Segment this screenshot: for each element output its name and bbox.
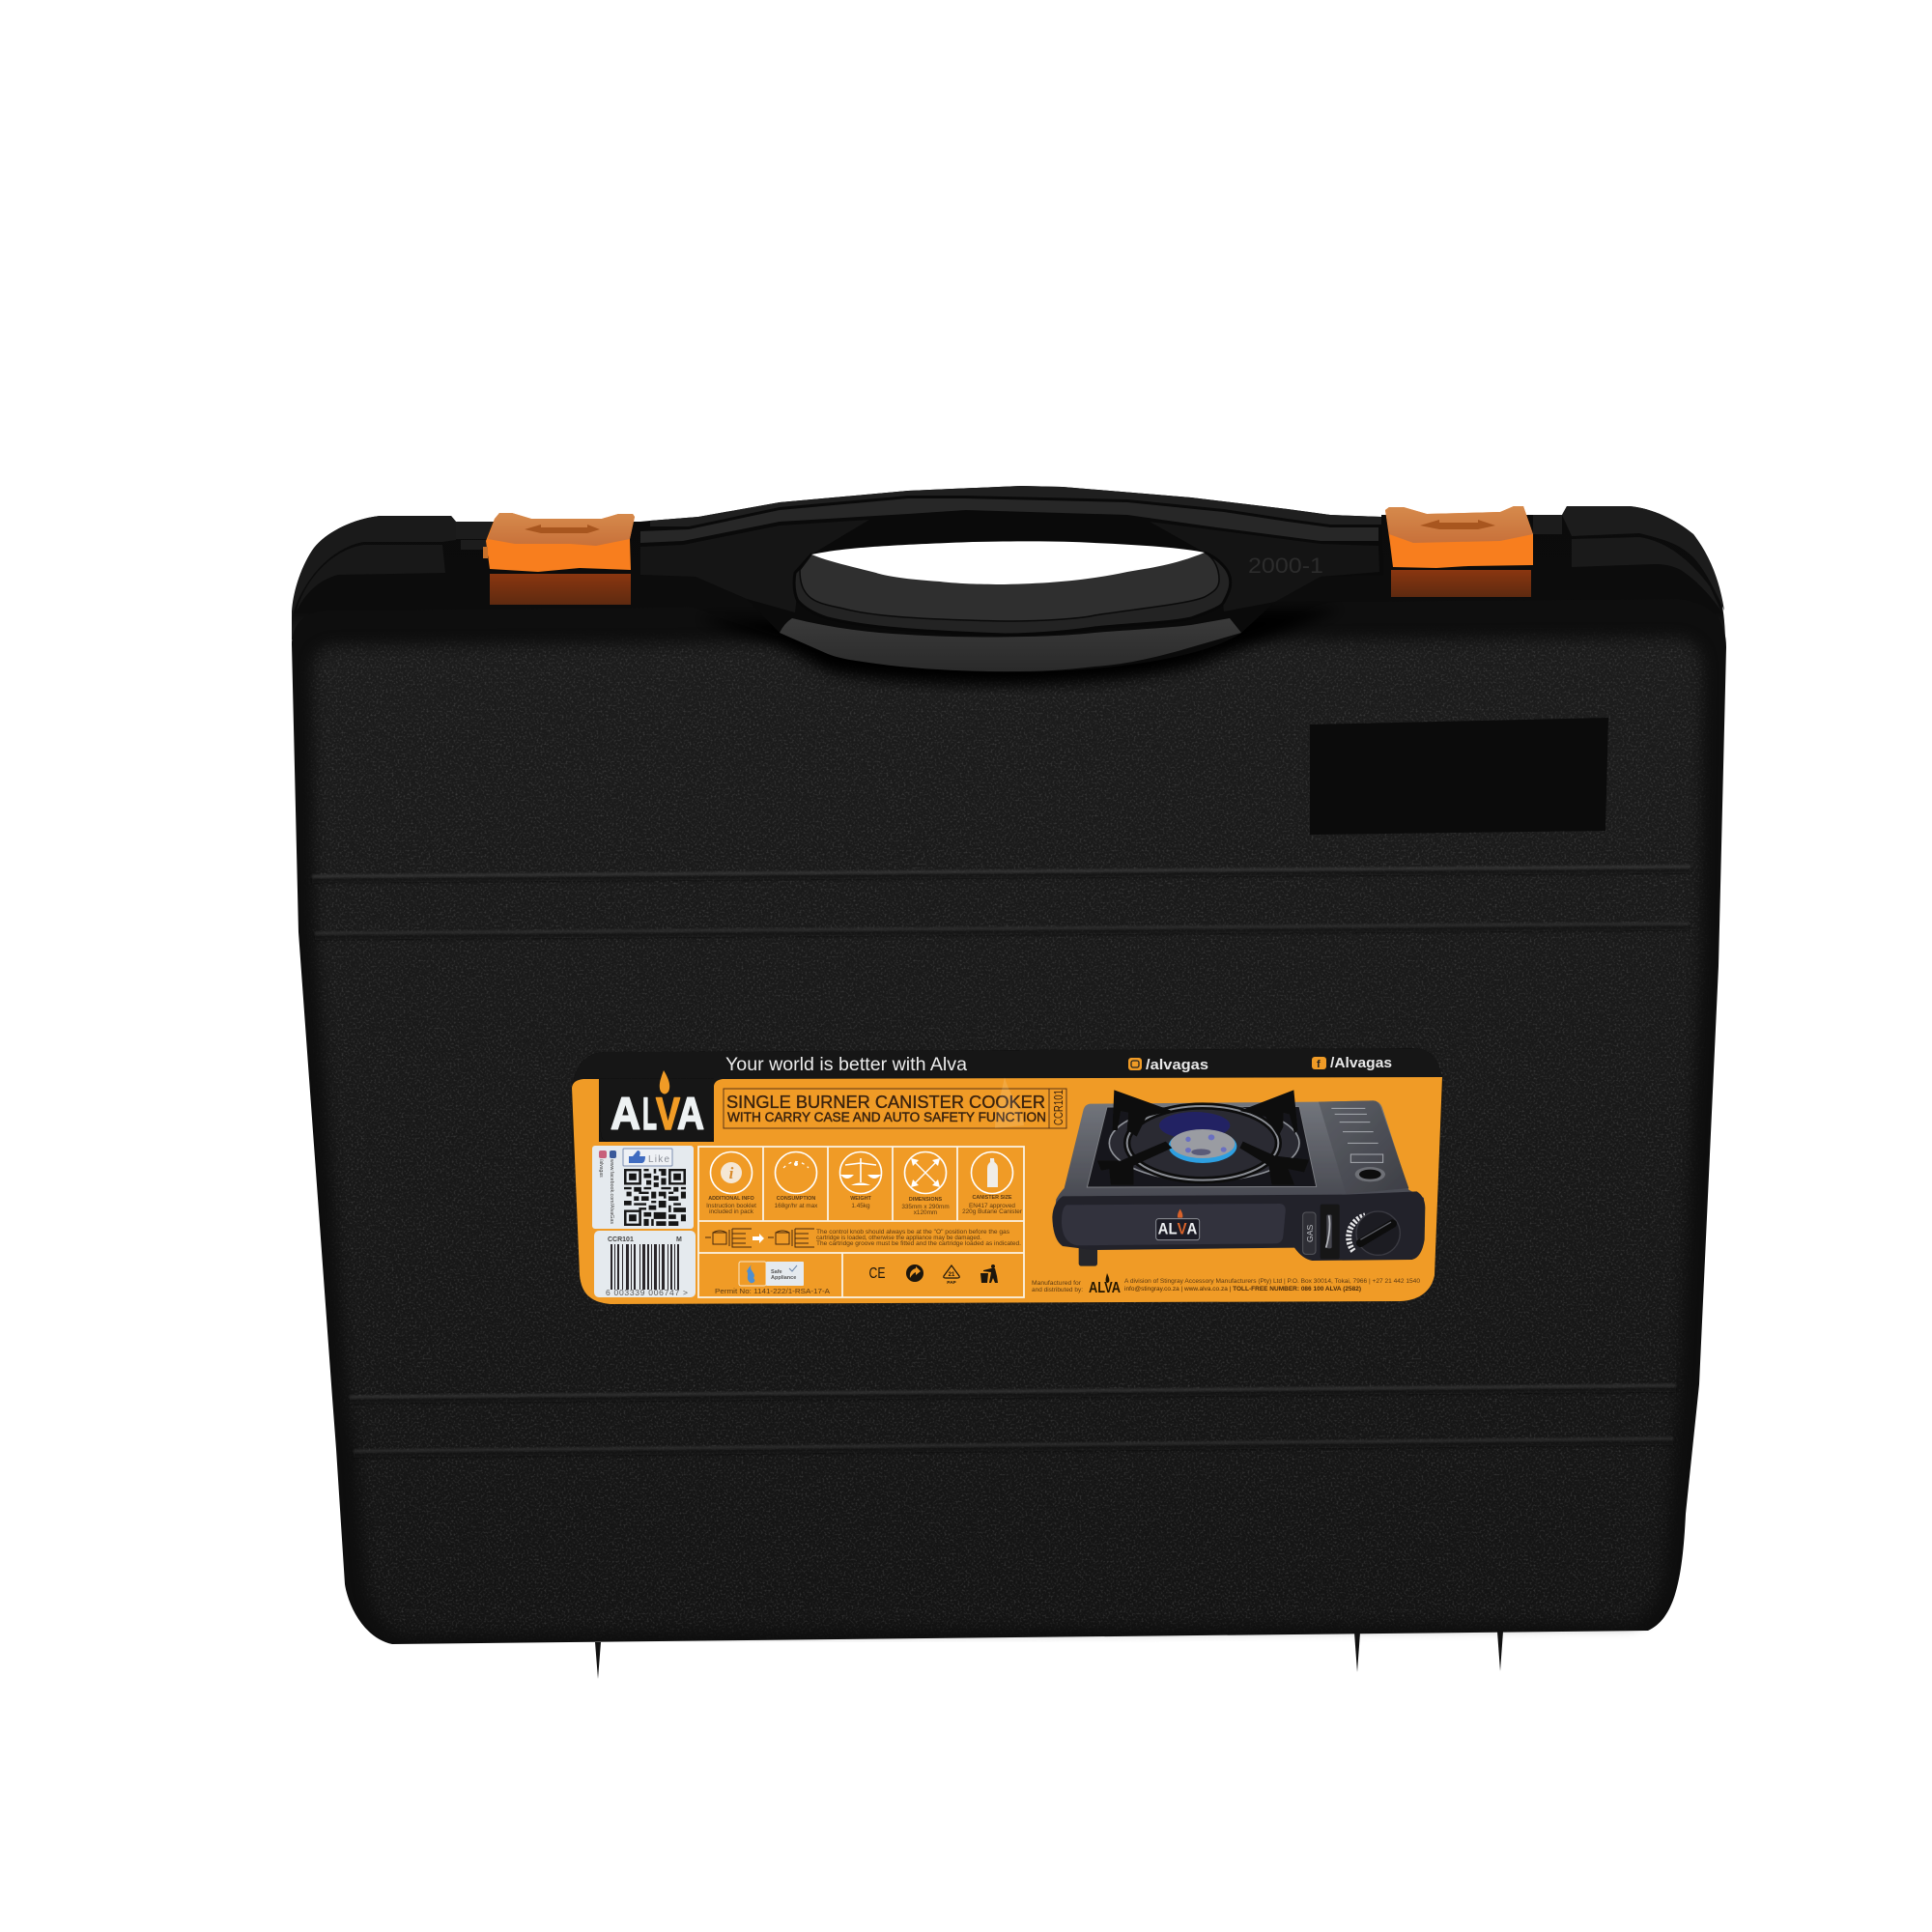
handle inner ring	[794, 553, 1231, 635]
stove foot	[1079, 1246, 1097, 1266]
blue flame glow	[1159, 1112, 1230, 1139]
tidy man symbol	[980, 1264, 998, 1283]
stove product photo	[1052, 1090, 1425, 1266]
CE mark: CE	[869, 1265, 885, 1282]
label orange base	[572, 1077, 1442, 1304]
spec: dimensions	[901, 1151, 950, 1216]
left orange latch	[483, 513, 635, 572]
logo: L	[642, 1088, 657, 1139]
white arrow	[753, 1234, 764, 1243]
logo: A	[611, 1088, 640, 1139]
cooking well	[1087, 1106, 1317, 1187]
spec: canister size: EN417 approved	[969, 1203, 1015, 1209]
cartridge instructions: cartridge is loaded, otherwise the appliance may be damaged.	[816, 1235, 981, 1241]
spec: consumption	[775, 1151, 818, 1209]
social icons	[599, 1151, 607, 1158]
handle top strip	[650, 486, 1381, 526]
label gloss reflection	[995, 1077, 1024, 1128]
spec: weight: WEIGHT	[850, 1196, 871, 1202]
right hinge lower tab	[1572, 537, 1721, 611]
product label	[572, 1048, 1443, 1304]
latch reflection left	[490, 574, 631, 605]
cartridge instructions: The control knob should always be at the "O" position before the gas	[816, 1229, 1009, 1236]
specifications grid	[698, 1147, 1024, 1297]
cartridge instructions: The cartridge groove must be fitted and the cartridge loaded as indicated.	[816, 1240, 1021, 1247]
instagram handle: /alvagas	[1146, 1057, 1208, 1073]
latch reflection right	[1391, 570, 1531, 597]
right gap detail	[1533, 515, 1562, 534]
manufacturer text: info@stingray.co.za | www.alva.co.za | TOLL-FREE NUMBER: 086 100 ALVA (2582)	[1124, 1286, 1361, 1293]
facebook handle: f	[1317, 1059, 1321, 1070]
spec: additional info: Instruction booklet	[706, 1203, 756, 1209]
control panel plate	[1319, 1100, 1408, 1194]
label black strip	[572, 1048, 1443, 1159]
small logo	[1089, 1273, 1121, 1296]
spec: dimensions: x120mm	[914, 1209, 937, 1216]
pan support	[1097, 1090, 1309, 1185]
small logo: ALVA	[1089, 1280, 1121, 1296]
spec: canister size: 220g Butane Canister	[962, 1208, 1023, 1215]
handle body	[640, 486, 1383, 672]
grid lines	[698, 1147, 1024, 1297]
product title box	[724, 1089, 1066, 1128]
gas switch: GAS	[1305, 1224, 1315, 1242]
product title box: WITH CARRY CASE AND AUTO SAFETY FUNCTION	[727, 1110, 1046, 1124]
handle recess	[800, 553, 1219, 621]
handle opening	[811, 541, 1205, 584]
spec: additional info: i	[729, 1164, 734, 1182]
control knob	[1349, 1211, 1400, 1255]
spec: consumption: CONSUMPTION	[777, 1196, 815, 1202]
barcode panel	[594, 1231, 696, 1297]
stove top plate	[1053, 1100, 1425, 1227]
QR panel	[592, 1146, 694, 1229]
carry case	[290, 486, 1729, 1679]
manufacturer text: and distributed by:	[1032, 1287, 1083, 1293]
stove logo: ALVA	[1158, 1219, 1197, 1237]
handle	[640, 486, 1383, 672]
spec: consumption: 168gr/hr at max	[775, 1203, 818, 1209]
textured panel	[290, 618, 1729, 1642]
spec: weight	[840, 1151, 881, 1209]
barcode panel: 6 003339 006747 >	[606, 1288, 688, 1297]
stove front face	[1052, 1191, 1425, 1261]
QR code	[624, 1169, 686, 1226]
case front body	[292, 599, 1726, 1644]
logo	[611, 1070, 704, 1139]
canister hatch	[1355, 1167, 1385, 1181]
spec: dimensions: DIMENSIONS	[909, 1197, 942, 1203]
manufacturer text: A division of Stingray Accessory Manufacturers (Pty) Ltd | P.O. Box 30014, Tokai, 7966 | +27 21 442 1540	[1124, 1278, 1420, 1285]
barcode panel: M	[676, 1236, 682, 1243]
safe appliance badge	[739, 1262, 804, 1286]
spec: weight: 1.45kg	[851, 1203, 870, 1209]
left hinge lower tab	[297, 545, 445, 611]
handle grip lip	[780, 618, 1241, 671]
right hinge upper tab	[1562, 506, 1724, 611]
spec: additional info: ADDITIONAL INFO	[708, 1196, 754, 1202]
spec: canister size	[962, 1151, 1023, 1215]
spec: canister size: CANISTER SIZE	[972, 1195, 1012, 1201]
burner head	[1169, 1129, 1236, 1163]
vertical web addresses: www.facebook.com/AlvaGas	[609, 1159, 614, 1225]
permit number: Permit No: 1141-222/1-RSA-17-A	[715, 1287, 830, 1295]
green dot	[906, 1264, 923, 1282]
product title box: CCR101	[1051, 1090, 1065, 1125]
drip bowl	[1109, 1105, 1299, 1181]
like button: Like	[648, 1154, 669, 1165]
barcode panel: CCR101	[608, 1236, 634, 1243]
gas switch	[1303, 1205, 1340, 1259]
product title box: SINGLE BURNER CANISTER COOKER	[726, 1092, 1045, 1112]
cartridge instructions	[816, 1229, 1021, 1247]
moulded ridges	[312, 867, 1690, 1455]
logo flame	[660, 1070, 669, 1094]
handle right cheek	[1150, 522, 1379, 611]
facebook handle: /Alvagas	[1330, 1055, 1392, 1071]
left hinge upper tab	[292, 516, 456, 618]
period after opening symbol: PAP	[947, 1280, 957, 1286]
safe appliance badge: Appliance	[771, 1275, 796, 1281]
spec: additional info: included in pack	[709, 1208, 754, 1215]
handle shadow	[696, 609, 1343, 685]
black patch	[1310, 718, 1608, 835]
case grain texture	[290, 618, 1729, 1642]
period after opening symbol	[944, 1265, 959, 1286]
logo black block	[599, 1078, 714, 1142]
tagline: Your world is better with Alva	[725, 1055, 967, 1075]
stove logo	[1156, 1209, 1200, 1240]
QR panel: /alvagas	[598, 1159, 604, 1178]
cartridge loading diagram	[705, 1229, 814, 1247]
left gap detail	[456, 522, 493, 550]
safe appliance badge: Safe	[771, 1269, 782, 1275]
spec: additional info	[706, 1151, 756, 1215]
case rear shell	[292, 506, 1725, 639]
spec: dimensions: 335mm x 290mm	[901, 1204, 950, 1210]
period after opening symbol: 21	[949, 1272, 955, 1278]
logo: V	[656, 1088, 681, 1139]
handle left cheek	[640, 520, 869, 612]
bottom feet spikes	[595, 1632, 1503, 1679]
manufacturer text: Manufactured for	[1032, 1280, 1082, 1287]
handle second strip	[640, 498, 1378, 543]
manufacturer text	[1032, 1273, 1420, 1296]
front recess panel	[1062, 1204, 1286, 1245]
handle embossed number: 2000-1	[1248, 554, 1323, 578]
logo: A	[677, 1088, 704, 1139]
right orange latch	[1385, 506, 1533, 568]
